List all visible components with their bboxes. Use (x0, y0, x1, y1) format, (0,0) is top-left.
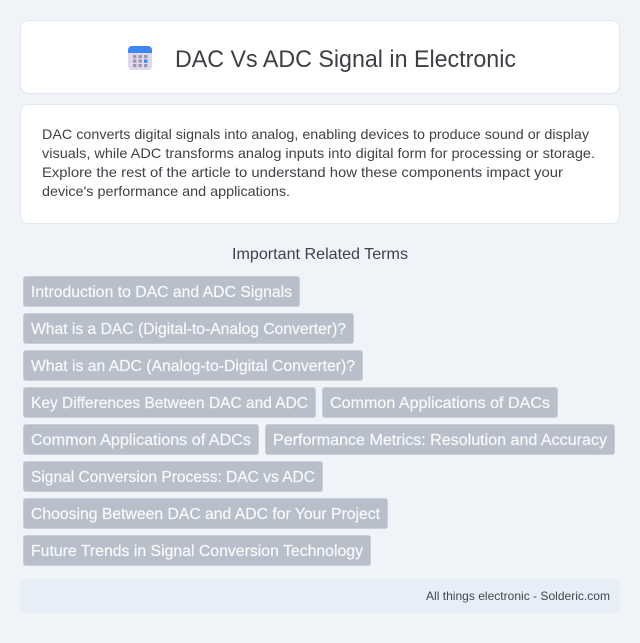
tag: applications of ADCs: Common Applications of ADCs (31, 432, 251, 449)
tag: future trends: Future Trends in Signal Conversion Technology (31, 543, 363, 560)
text block: description: visuals, while ADC transforms analog inputs into digital form for processing or storage. (42, 145, 595, 161)
tag: performance metrics (266, 424, 614, 454)
tag: what is an ADC: What is an ADC (Analog-to-Digital Converter)? (31, 358, 355, 375)
tag: choosing: Choosing Between DAC and ADC for Your Project (31, 506, 381, 523)
text block: description: DAC converts digital signals into analog, enabling devices to produce sound or display (42, 126, 589, 142)
tag: introduction (24, 276, 300, 306)
footer text: All things electronic - Solderic.com (426, 589, 610, 603)
tag: applications of DACs: Common Applications of DACs (330, 395, 550, 412)
footer (20, 579, 620, 613)
tag: what is an ADC (24, 350, 362, 380)
tag: what is a DAC (24, 314, 354, 344)
tag: choosing (24, 498, 388, 528)
tag list (24, 276, 614, 566)
panel: header (20, 20, 620, 94)
tag: future trends (24, 536, 370, 566)
tag: applications of ADCs (24, 424, 258, 454)
tag: conversion process: Signal Conversion Process: DAC vs ADC (31, 469, 315, 486)
text block: description: Explore the rest of the article to understand how these components impact your (42, 164, 563, 180)
tag: conversion process (24, 462, 322, 492)
title: DAC Vs ADC Signal in Electronic (175, 46, 516, 73)
text block: description: device's performance and applications. (42, 183, 290, 199)
tag: introduction: Introduction to DAC and ADC Signals (31, 284, 292, 301)
icon: calendar (128, 46, 152, 70)
tag: performance metrics: Performance Metrics: Resolution and Accuracy (273, 432, 607, 449)
tag: applications of DACs (322, 388, 558, 418)
tag: what is a DAC: What is a DAC (Digital-to-Analog Converter)? (31, 321, 346, 338)
text block: description (42, 126, 595, 199)
panel: description (20, 104, 620, 224)
tag: key differences (24, 388, 316, 418)
tag: key differences: Key Differences Between DAC and ADC (31, 395, 308, 412)
heading: important related terms: Important Related Terms (232, 246, 408, 263)
